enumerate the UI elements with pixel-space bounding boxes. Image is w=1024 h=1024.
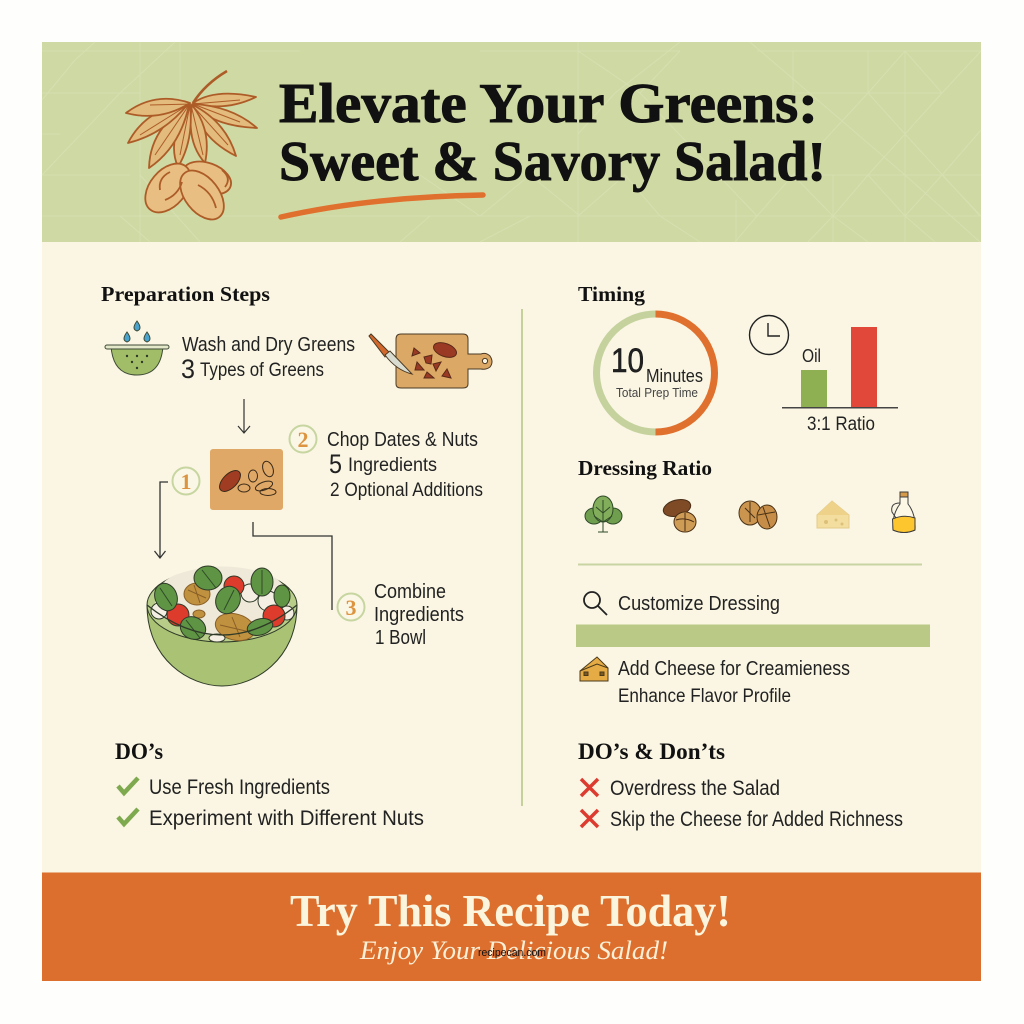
connector: step 3 (253, 522, 332, 610)
icon: date palm with dates (126, 71, 257, 228)
chart: oil ratio bars (782, 327, 898, 435)
text: add cheese: Add Cheese for Creamieness (618, 658, 850, 680)
list: don'ts (581, 777, 903, 831)
bar: green band (576, 624, 930, 647)
panel: footer banner: Try This Recipe Today! (290, 886, 731, 936)
icon: colander with water drops (105, 321, 169, 375)
icon: salad bowl (147, 566, 297, 686)
icon: magnifier (584, 592, 607, 615)
list: don'ts: Skip the Cheese for Added Richness (610, 808, 903, 831)
arrow: step 1 to bowl (154, 482, 168, 558)
heading: preparation steps: Preparation Steps (101, 282, 270, 306)
text: step wash (181, 334, 355, 384)
heading: do's and don'ts: DO’s & Don’ts (578, 739, 725, 764)
text: add cheese: Enhance Flavor Profile (618, 686, 791, 707)
text: step combine (374, 581, 464, 649)
chart: 10 minutes ring: Minutes (646, 366, 703, 386)
text: step combine: 1 Bowl (375, 627, 426, 649)
icon: walnut (739, 501, 777, 529)
list: do's: Experiment with Different Nuts (149, 807, 424, 830)
badge: step 3 (338, 594, 364, 620)
text: step chop: 5 (329, 449, 342, 479)
list: don'ts: Overdress the Salad (610, 777, 780, 800)
text: step wash: Types of Greens (200, 360, 324, 381)
text: customize dressing: Customize Dressing (618, 593, 780, 615)
icon: square of dates and nuts (210, 449, 283, 510)
text: step chop: 2 Optional Additions (330, 480, 483, 501)
text: step combine: Ingredients (374, 604, 464, 626)
separator line (578, 564, 922, 566)
badge: step 1 (172, 468, 200, 494)
badge: step 1: 1 (180, 469, 192, 494)
watermark: recipecan.com (478, 947, 546, 959)
panel: footer banner: Enjoy Your Delicious Salad! (359, 936, 668, 965)
list: do's: Use Fresh Ingredients (149, 776, 330, 799)
chart: oil ratio bars: 3:1 Ratio (807, 414, 875, 435)
icon: cutting board and knife (369, 334, 492, 388)
text: step wash: Wash and Dry Greens (182, 334, 355, 356)
chart: 10 minutes ring: 10 (611, 342, 644, 380)
heading: dressing ratio: Dressing Ratio (578, 456, 712, 480)
panel: body background (42, 242, 981, 873)
title: Sweet & Savory Salad! (279, 131, 826, 193)
chart: oil ratio bars: Oil (802, 346, 821, 366)
title (279, 73, 826, 193)
text: step wash: 3 (181, 354, 195, 384)
badge: step 2 (290, 426, 316, 452)
text: step chop: Ingredients (348, 455, 437, 476)
text: step chop: Chop Dates & Nuts (327, 429, 478, 451)
column divider (521, 309, 523, 806)
icon: spinach (585, 496, 622, 532)
panel: header (42, 42, 981, 242)
icon: cheese (580, 657, 608, 681)
title: Elevate Your Greens: (279, 73, 818, 135)
heading: do's: DO’s (115, 739, 163, 764)
chart: 10 minutes ring (596, 314, 714, 432)
text: step combine: Combine (374, 581, 446, 603)
chart: 10 minutes ring: Total Prep Time (616, 385, 698, 400)
text: step chop (327, 429, 483, 501)
icon: clock (750, 316, 788, 354)
title underline stroke (281, 195, 483, 217)
icon: date and walnut (661, 497, 696, 532)
icon: oil bottle (892, 492, 915, 532)
badge: step 2: 2 (298, 427, 308, 452)
heading: timing: Timing (578, 282, 646, 306)
icon: cheese wedge (817, 501, 849, 528)
list: do's (118, 776, 424, 830)
text: add cheese (618, 658, 850, 707)
arrow: wash to chop (238, 399, 250, 433)
badge: step 3: 3 (346, 595, 356, 620)
panel: footer banner (42, 872, 981, 981)
